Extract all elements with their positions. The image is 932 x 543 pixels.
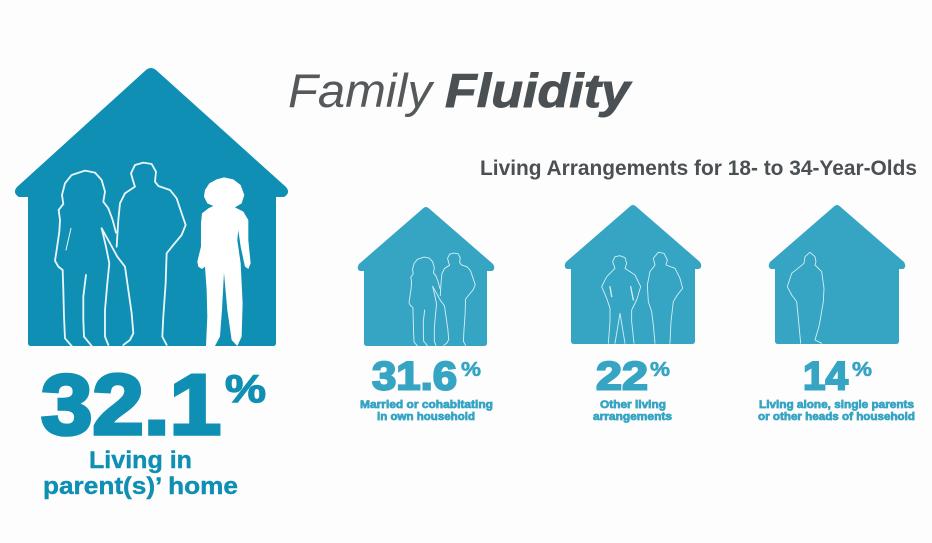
figures: couple outline — [409, 253, 475, 346]
percent sign: % — [461, 359, 481, 381]
label line 1: Married or cohabitating — [360, 399, 493, 411]
label: living in: Living in — [89, 447, 192, 474]
percent sign: % — [225, 368, 266, 411]
figure: man outline — [787, 252, 824, 343]
figure: woman outline — [55, 171, 133, 346]
percent sign: % — [650, 359, 670, 381]
stat: 32.1 percent: 32.1 — [41, 358, 221, 453]
label line 1: Other living — [600, 399, 666, 411]
figure: man with hands on hips — [602, 256, 641, 343]
stat: 14 percent: 14 — [803, 354, 849, 398]
title: Fluidity — [445, 64, 633, 117]
label line 2: or other heads of household — [758, 411, 915, 423]
stat: 22 percent: 22 — [596, 354, 648, 398]
percent sign: % — [852, 359, 872, 381]
title: Family — [288, 64, 435, 117]
icon: house — [769, 205, 905, 344]
label line 2: in own household — [377, 411, 475, 423]
panel: other living arrangements — [565, 205, 701, 423]
panel: living alone — [758, 205, 915, 423]
stat: 31.6 percent: 31.6 — [372, 354, 457, 398]
figure: man outline — [117, 163, 186, 345]
panel: living in parents' home — [15, 68, 288, 500]
icon: large house — [15, 68, 288, 346]
icon: house — [358, 207, 494, 346]
label: parents' home: parent(s)’ home — [43, 473, 238, 500]
label line 1: Living alone, single parents — [759, 399, 914, 411]
icon: house — [565, 205, 701, 344]
title — [288, 64, 633, 117]
panel: married or cohabitating — [358, 207, 494, 423]
label line 2: arrangements — [593, 411, 672, 423]
figure: man outline — [647, 252, 683, 343]
figure: solid white woman — [197, 177, 251, 346]
subtitle: Living Arrangements for 18- to 34-Year-Olds — [480, 156, 917, 180]
